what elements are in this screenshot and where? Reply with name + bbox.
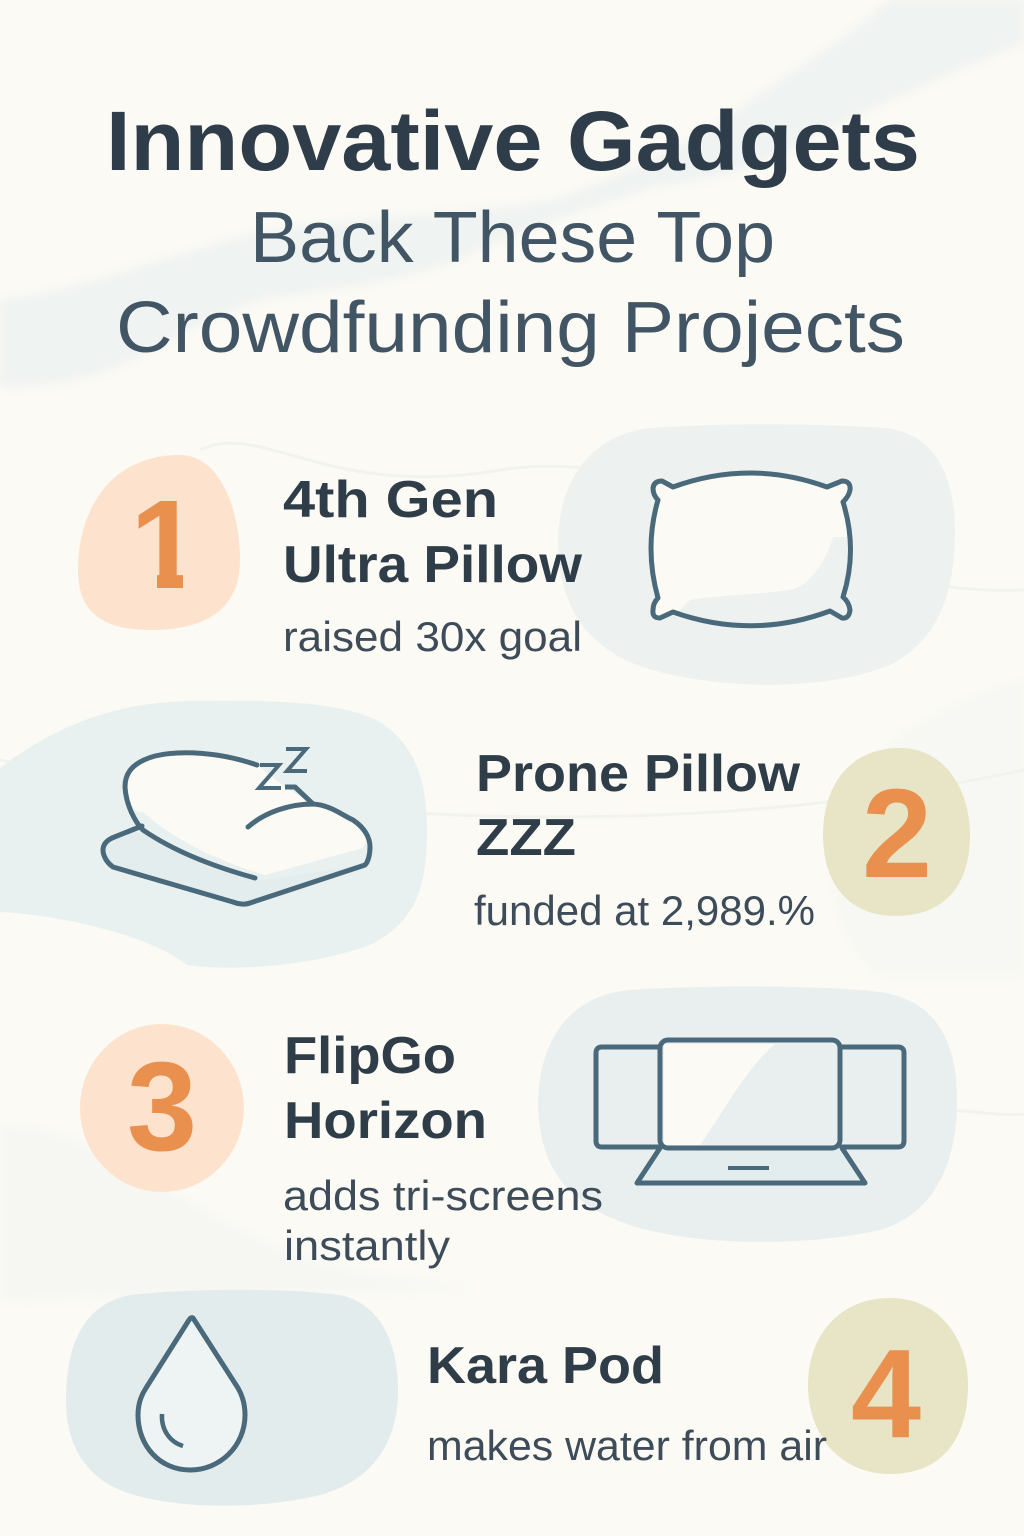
panel: Prone Pillow ZZZ: ZZZ xyxy=(476,809,576,867)
icon: sleeping pillow xyxy=(103,749,370,904)
number badge 2: 2 xyxy=(862,763,932,904)
title xyxy=(106,94,920,368)
number badge 1: 1 xyxy=(130,474,200,615)
panel: 4th Gen Ultra Pillow: Ultra Pillow xyxy=(283,536,583,594)
icon background blob xyxy=(0,701,427,968)
icon: laptop with tri-screens xyxy=(596,1040,904,1183)
item description: adds tri-screens xyxy=(283,1172,603,1219)
panel: FlipGo Horizon: instantly xyxy=(284,1222,450,1269)
panel: Kara Pod xyxy=(66,1290,968,1506)
panel: 4th Gen Ultra Pillow xyxy=(78,424,955,685)
item description: makes water from air xyxy=(427,1422,827,1469)
subheading line 2: Crowdfunding Projects xyxy=(116,288,905,368)
icon background blob xyxy=(538,986,957,1242)
panel: FlipGo Horizon: Horizon xyxy=(284,1092,487,1150)
item name: FlipGo xyxy=(284,1027,456,1085)
item description: raised 30x goal xyxy=(283,613,582,660)
panel: FlipGo Horizon xyxy=(80,986,957,1269)
number badge 3 xyxy=(80,1024,244,1192)
icon background blob xyxy=(558,424,955,685)
item description: funded at 2,989.% xyxy=(474,887,815,934)
icon: pillow xyxy=(651,473,850,626)
icon background blob xyxy=(66,1290,398,1506)
item name: 4th Gen xyxy=(283,471,498,529)
item name: Kara Pod xyxy=(427,1337,664,1395)
icon: water drop xyxy=(138,1318,245,1470)
subheading line 1: Back These Top xyxy=(250,198,775,278)
icon: zzz letters xyxy=(259,749,307,788)
number badge 4 xyxy=(808,1298,968,1474)
item name: Prone Pillow xyxy=(476,745,801,803)
heading: Innovative Gadgets: Innovative Gadgets xyxy=(106,94,920,188)
number badge 3: 3 xyxy=(127,1036,197,1177)
number badge 1 xyxy=(78,455,240,630)
number badge 2 xyxy=(823,748,970,916)
number badge 4: 4 xyxy=(851,1323,921,1464)
panel: Prone Pillow ZZZ xyxy=(0,701,970,968)
